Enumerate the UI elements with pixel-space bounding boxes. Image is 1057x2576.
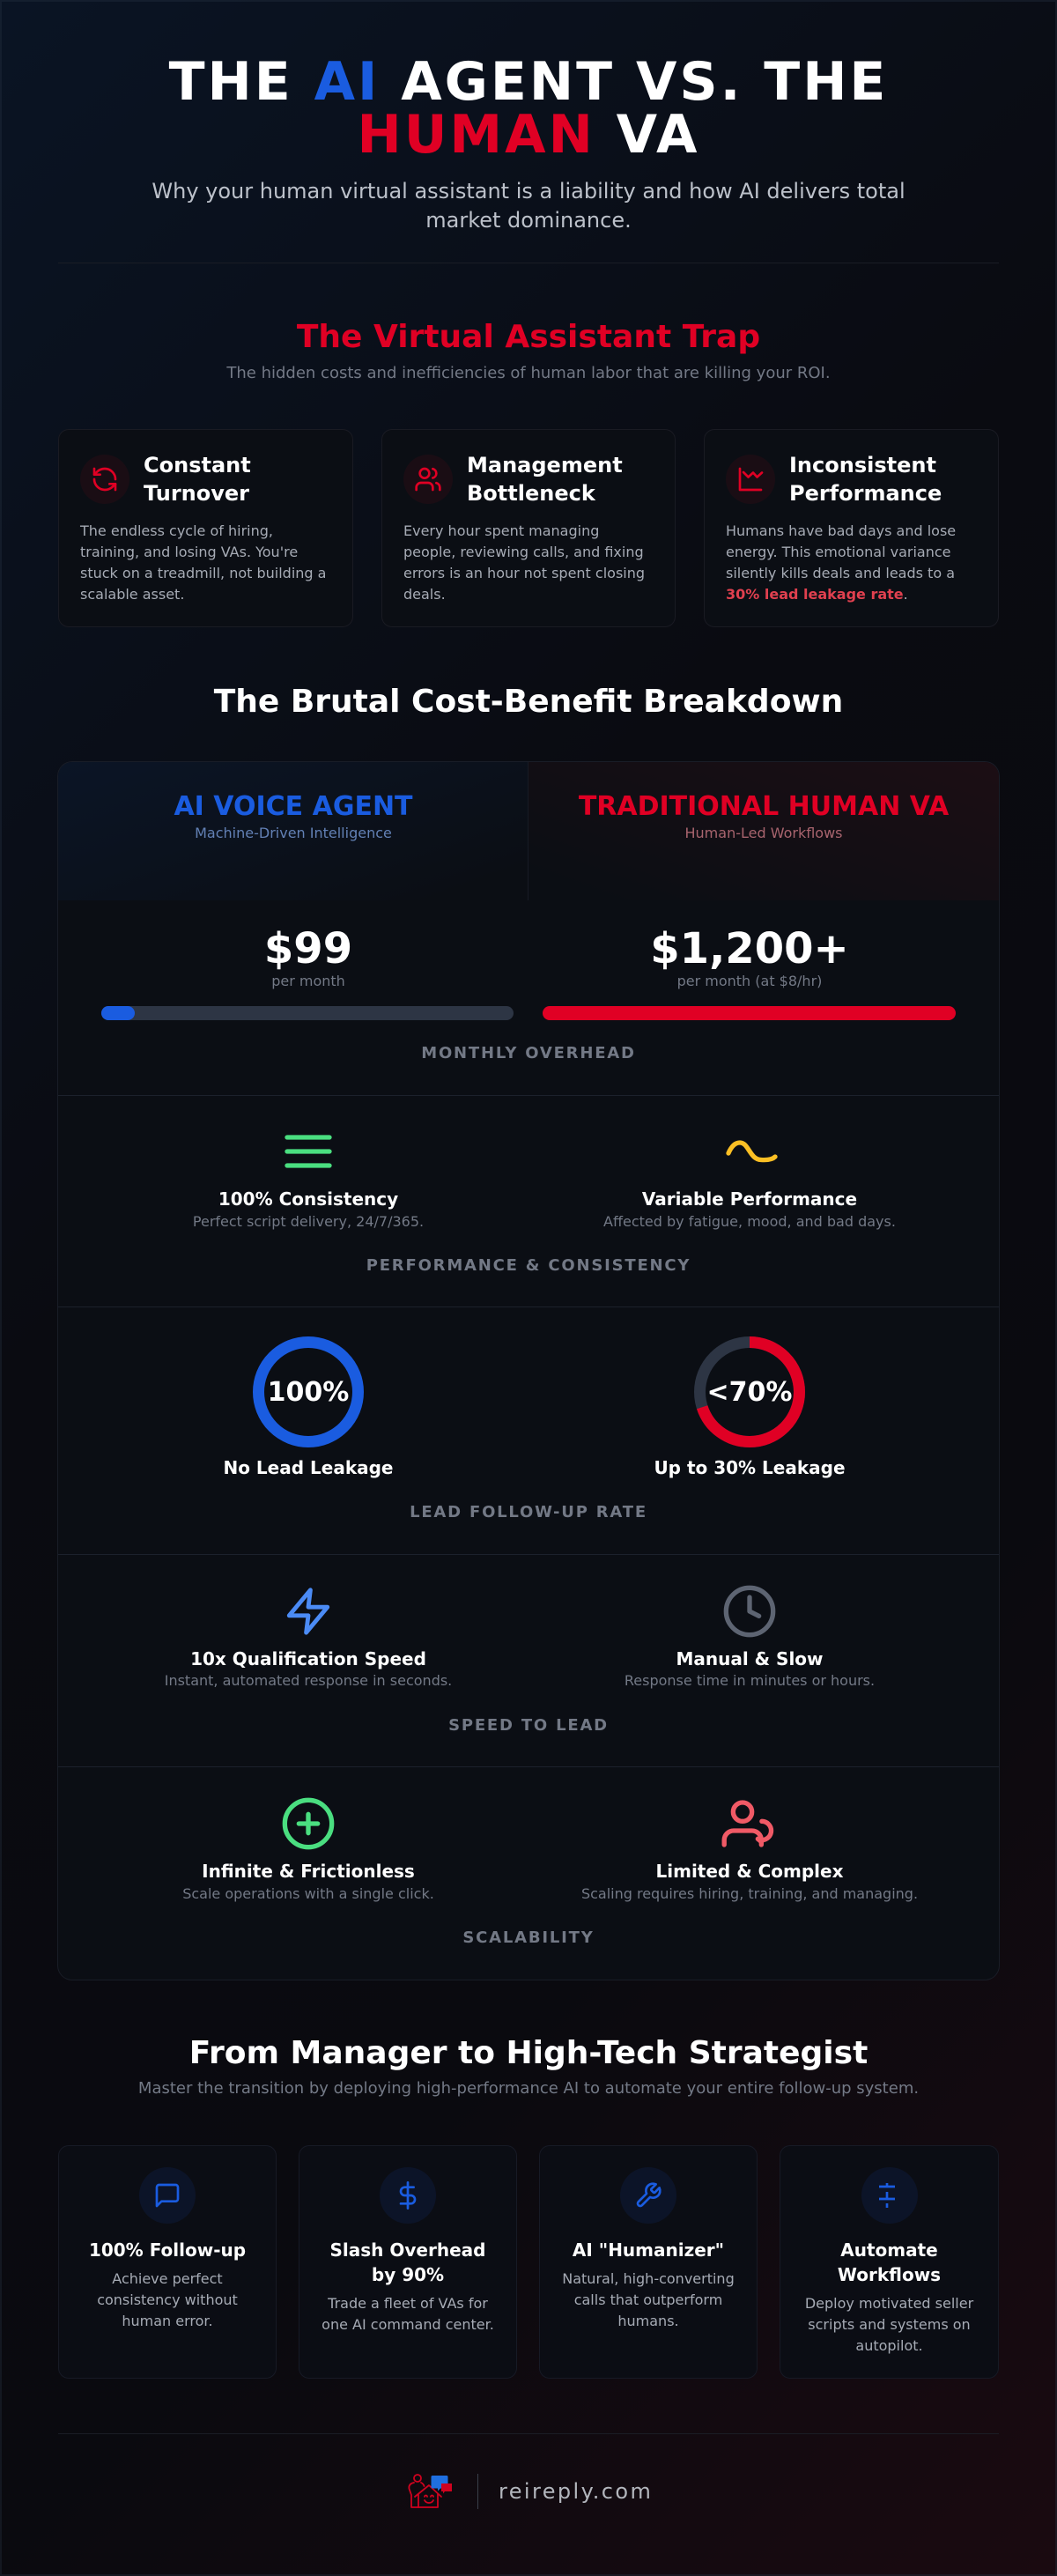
icon: dollar	[380, 2167, 436, 2224]
icon: sliders	[861, 2167, 918, 2224]
row label: SCALABILITY	[462, 1928, 595, 1947]
metric text: Perfect script delivery, 24/7/365.	[193, 1213, 424, 1230]
card text: calls that outperform	[574, 2291, 722, 2308]
card text	[79, 522, 326, 603]
metric text: Affected by fatigue, mood, and bad days.	[603, 1213, 896, 1230]
title: HUMAN VA	[358, 104, 699, 166]
footer	[408, 2474, 653, 2509]
bar: human cost	[543, 1006, 956, 1020]
panel: 100% follow-up	[58, 2145, 277, 2379]
card text: people, reviewing calls, and fixing	[403, 544, 644, 560]
price: human: $1,200+	[650, 924, 849, 973]
metric title: No Lead Leakage	[223, 1457, 393, 1478]
card text: Natural, high-converting	[562, 2270, 735, 2287]
subtitle	[152, 179, 905, 233]
card title: Constant	[144, 453, 251, 477]
metric title: Manual & Slow	[676, 1648, 824, 1669]
card text: one AI command center.	[322, 2316, 494, 2333]
logo icon	[408, 2474, 452, 2508]
icon: clock	[724, 1586, 775, 1637]
card title: Automate	[840, 2239, 938, 2261]
donut: under 70%	[694, 1336, 805, 1447]
card text	[726, 522, 956, 603]
section subheading: trap: The hidden costs and inefficiencies of human labor that are killing your ROI.	[226, 364, 831, 382]
card text: Humans have bad days and lose	[726, 522, 956, 539]
donut: 100%	[253, 1336, 364, 1447]
icon: even lines	[285, 1135, 332, 1168]
price: AI: $99	[264, 924, 352, 973]
card title: by 90%	[372, 2264, 444, 2285]
card text	[97, 2270, 238, 2329]
card text	[322, 2295, 494, 2333]
card text: Trade a fleet of VAs for	[328, 2295, 488, 2312]
row: lead follow-up rate	[58, 1307, 999, 1554]
card title	[838, 2239, 941, 2285]
card text: scripts and systems on	[808, 2316, 971, 2333]
column header: traditional human VA	[528, 762, 999, 900]
card title: Performance	[789, 481, 942, 506]
metric title: 100% Consistency	[218, 1188, 398, 1210]
panel: automate workflows	[780, 2145, 999, 2379]
panel: management bottleneck	[381, 429, 676, 627]
row: speed to lead	[58, 1554, 999, 1766]
header	[152, 51, 905, 233]
icon: person with arrow	[722, 1800, 773, 1847]
metric title: Up to 30% Leakage	[654, 1457, 846, 1478]
panel: slash overhead	[299, 2145, 517, 2379]
card text: humans.	[617, 2313, 679, 2329]
title: THE AI AGENT VS. THE	[169, 51, 888, 113]
card title	[330, 2239, 485, 2285]
section heading: manager to strategist: From Manager to High-Tech Strategist	[189, 2035, 868, 2071]
card title: 100% Follow-up	[89, 2239, 246, 2261]
card text: consistency without	[97, 2291, 238, 2308]
icon: plus circle	[282, 1797, 335, 1850]
row label: SPEED TO LEAD	[448, 1716, 609, 1735]
subtitle: market dominance.	[425, 208, 632, 233]
card text	[403, 522, 645, 603]
card title: AI "Humanizer"	[573, 2239, 724, 2261]
price note: AI: per month	[271, 973, 345, 989]
row: monthly overhead	[101, 924, 956, 1062]
panel: comparison table	[58, 762, 999, 1980]
card text: Every hour spent managing	[403, 522, 599, 539]
card text	[805, 2295, 974, 2354]
section subheading: strategist: Master the transition by deploying high-performance AI to automate your entire follow-up system.	[138, 2079, 919, 2098]
card text: stuck on a treadmill, not building a	[80, 565, 326, 581]
metric text: Response time in minutes or hours.	[625, 1672, 875, 1689]
card text: errors is an hour not spent closing	[403, 565, 645, 581]
card text: Deploy motivated seller	[805, 2295, 973, 2312]
card title	[789, 453, 942, 506]
row: performance and consistency	[58, 1095, 999, 1307]
icon: line chart	[726, 455, 775, 504]
card title: Bottleneck	[467, 481, 595, 506]
panel: AI humanizer	[539, 2145, 758, 2379]
donut: under 70%: <70%	[707, 1377, 792, 1408]
metric text: Scale operations with a single click.	[182, 1885, 434, 1902]
card text: scalable asset.	[80, 586, 184, 603]
column title: AI VOICE AGENT	[174, 791, 413, 822]
card title: Turnover	[144, 481, 249, 506]
card text: energy. This emotional variance	[726, 544, 951, 560]
metric text: Scaling requires hiring, training, and managing.	[581, 1885, 918, 1902]
column title: TRADITIONAL HUMAN VA	[579, 791, 949, 822]
row label: MONTHLY OVERHEAD	[421, 1044, 636, 1062]
icon: lightning bolt	[287, 1588, 329, 1635]
metric title: Infinite & Frictionless	[202, 1861, 415, 1882]
card text	[562, 2270, 735, 2329]
card text: silently kills deals and leads to a	[726, 565, 955, 581]
panel: constant turnover	[58, 429, 353, 627]
subtitle: Why your human virtual assistant is a liability and how AI delivers total	[152, 179, 905, 204]
column subtitle: Machine-Driven Intelligence	[195, 825, 392, 841]
section heading: the virtual assistant trap: The Virtual Assistant Trap	[297, 319, 760, 355]
card title: Management	[467, 453, 623, 477]
price note: human: per month (at $8/hr)	[677, 973, 822, 989]
row label: LEAD FOLLOW-UP RATE	[410, 1503, 647, 1521]
icon: refresh	[80, 455, 129, 504]
column subtitle: Human-Led Workflows	[685, 825, 842, 841]
card text: autopilot.	[855, 2337, 923, 2354]
donut: 100%: 100%	[268, 1377, 349, 1408]
metric title: Limited & Complex	[655, 1861, 844, 1882]
icon: wrench	[620, 2167, 676, 2224]
icon: users	[403, 455, 453, 504]
card text: deals.	[403, 586, 446, 603]
card text: training, and losing VAs. You're	[80, 544, 298, 560]
bar: AI cost	[101, 1006, 514, 1020]
column header: AI voice agent	[58, 762, 528, 900]
card title	[144, 453, 251, 506]
row label: PERFORMANCE & CONSISTENCY	[366, 1256, 691, 1275]
card title	[467, 453, 623, 506]
title	[169, 51, 888, 166]
icon: wave	[726, 1140, 778, 1163]
vertical divider	[477, 2474, 478, 2509]
row: scalability	[58, 1766, 999, 1980]
metric title: 10x Qualification Speed	[190, 1648, 426, 1669]
card text: Achieve perfect	[112, 2270, 223, 2287]
card title: Workflows	[838, 2264, 941, 2285]
metric text: Instant, automated response in seconds.	[165, 1672, 452, 1689]
metric title: Variable Performance	[642, 1188, 857, 1210]
panel: inconsistent performance	[704, 429, 999, 627]
section heading: cost-benefit: The Brutal Cost-Benefit Breakdown	[214, 684, 843, 720]
card text: The endless cycle of hiring,	[80, 522, 273, 539]
card text: 30% lead leakage rate.	[726, 586, 908, 603]
card text: human error.	[122, 2313, 213, 2329]
icon: chat bubble	[139, 2167, 196, 2224]
card title: Slash Overhead	[330, 2239, 485, 2261]
brand text: reireply.com	[499, 2479, 653, 2504]
card title: Inconsistent	[789, 453, 936, 477]
